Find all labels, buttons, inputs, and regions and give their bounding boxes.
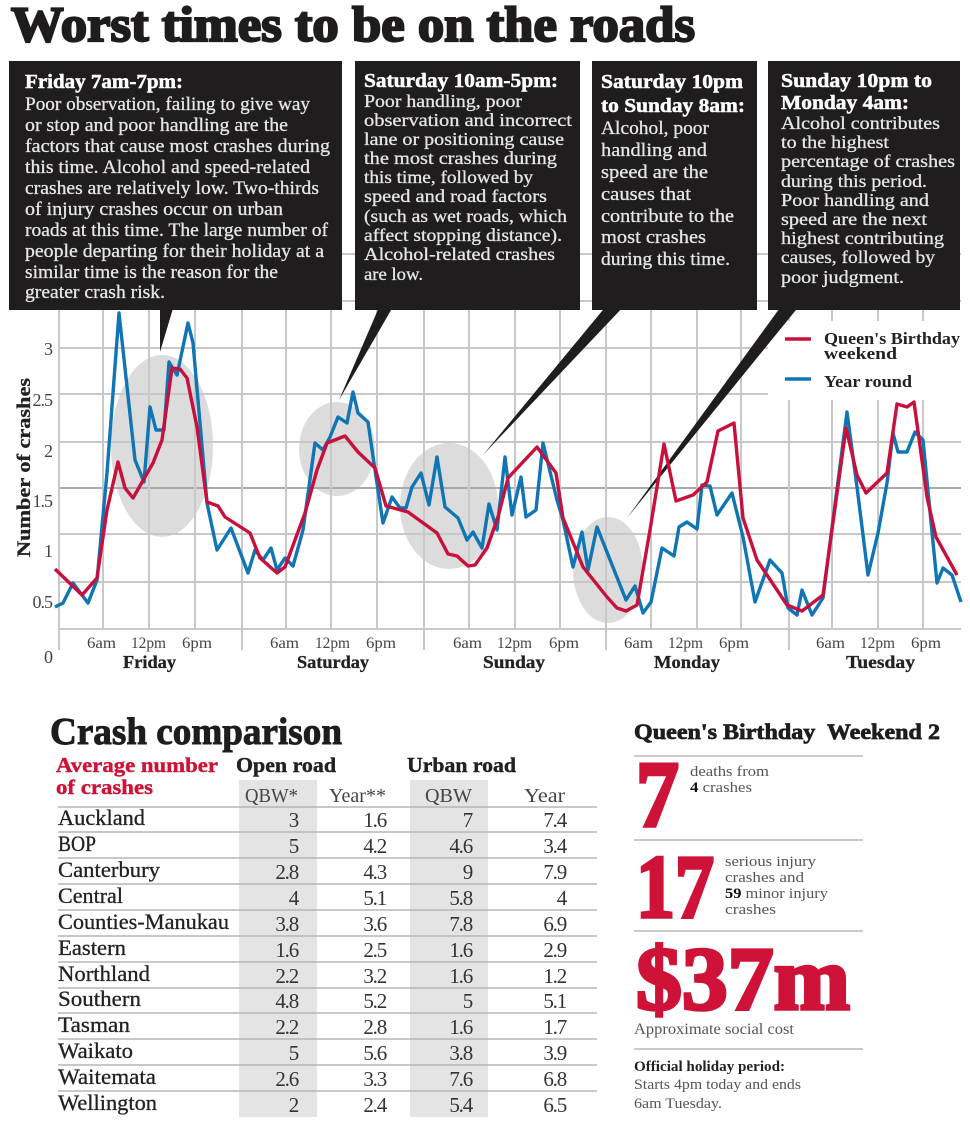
callout: Saturday 10pm to Sunday 8am: speed are the [601, 162, 708, 183]
pointer: Saturday night [483, 305, 625, 455]
column headings: QBW* [245, 785, 298, 807]
callout: Saturday 10am-5pm: are low. [364, 264, 423, 284]
column: open road Year: 4.2 [363, 834, 387, 858]
callout: Saturday 10pm to Sunday 8am [592, 61, 757, 310]
column: urban road Year: 4 [557, 886, 568, 910]
column: open road Year: 3.6 [363, 912, 387, 936]
x-axis time labels: 12pm [131, 635, 167, 652]
x-axis time labels: 6pm [719, 635, 750, 652]
column: urban road Year: 5.1 [543, 989, 567, 1013]
callout: Sunday 10pm to Monday 4am [768, 61, 960, 310]
x-axis time labels: 6am [624, 635, 654, 652]
column: urban road Year: 7.9 [543, 860, 567, 884]
callout: Saturday 10am-5pm: observation and incorrect [364, 110, 572, 130]
x-axis time labels: 12pm [497, 635, 533, 652]
column: urban road QBW: 7.6 [449, 1067, 473, 1091]
region names [58, 805, 229, 1115]
note: official holiday period: Starts 4pm today and ends [634, 1077, 801, 1093]
legend: weekend [824, 344, 898, 363]
note: official holiday period [634, 1059, 801, 1112]
callout: Sunday 10pm to Monday 4am: percentage of crashes [781, 151, 955, 171]
column: urban road Year: 7.4 [543, 808, 568, 832]
column: open road Year: 5.2 [363, 989, 387, 1013]
callout: Friday 7am-7pm: factors that cause most crashes during [25, 136, 331, 157]
region names: BOP [58, 831, 96, 856]
stat: injury crashes: crashes and [725, 870, 805, 886]
x-axis day labels: Monday [654, 652, 720, 672]
callout: Saturday 10am-5pm: Alcohol-related crashes [364, 244, 555, 264]
callout: Friday 7am-7pm: people departing for their holiday at a [25, 241, 325, 262]
legend: Queen's Birthday [824, 329, 961, 348]
line chart: crashes by time of day [14, 254, 968, 672]
legend background [768, 321, 968, 400]
y-axis labels: 2 [44, 441, 52, 461]
column: open road Year: 2.5 [363, 938, 387, 962]
table subtitle [56, 753, 218, 799]
column: open road Year [363, 808, 388, 1117]
callout: Saturday 10pm to Sunday 8am: contribute to the [601, 206, 734, 227]
legend: Year round [824, 372, 913, 391]
pointer: Sunday night [627, 305, 800, 518]
callout: Friday 7am-7pm: greater crash risk. [25, 282, 165, 303]
highlight ellipse: Saturday night [400, 443, 498, 569]
callout: Sunday 10pm to Monday 4am: Sunday 10pm to [781, 70, 932, 92]
x-axis time labels: 6am [816, 635, 846, 652]
column: urban road Year: 6.5 [543, 1093, 567, 1117]
callout: Sunday 10pm to Monday 4am: Monday 4am: [781, 92, 909, 114]
x-axis day labels: Sunday [483, 652, 545, 672]
callout: Saturday 10am-5pm: lane or positioning cause [364, 129, 564, 149]
column: urban road QBW: 7 [463, 808, 473, 832]
column: open road QBW: 2.2 [275, 964, 299, 988]
column headings [245, 785, 565, 807]
callout: Saturday 10pm to Sunday 8am: Saturday 10pm [601, 71, 743, 93]
region names: Central [58, 883, 123, 908]
highlight ellipse: Sunday night [573, 517, 643, 623]
panel: Queen's Birthday Weekend 2 [634, 719, 940, 1112]
y-axis labels: 1 [44, 541, 52, 561]
column: urban road QBW: 5.8 [449, 886, 473, 910]
y-axis labels: 2.5 [32, 390, 53, 410]
stat: injury crashes: 59 minor injury [725, 886, 829, 902]
callout: Sunday 10pm to Monday 4am: Poor handling and [781, 190, 929, 210]
column: open road Year: 2.8 [363, 1015, 387, 1039]
callout: Saturday 10am-5pm: the most crashes during [364, 148, 557, 168]
x-axis day labels [123, 652, 915, 672]
stat: deaths: deaths from [690, 764, 769, 780]
x-axis time labels: 6pm [911, 635, 942, 652]
y-axis labels: 1.5 [32, 491, 53, 511]
callout: Saturday 10pm to Sunday 8am: causes that [601, 184, 692, 205]
x-axis time labels: 6am [270, 635, 300, 652]
region names: Canterbury [58, 857, 160, 882]
x-axis time labels: 6pm [366, 635, 397, 652]
x-axis time labels: 6am [453, 635, 483, 652]
column: urban road QBW: 4.6 [449, 834, 473, 858]
column: open road Year: 3.3 [363, 1067, 387, 1091]
column: urban road QBW: 7.8 [449, 912, 473, 936]
column: urban road QBW [449, 808, 474, 1117]
x-axis time labels: 12pm [315, 635, 351, 652]
column: open road Year: 1.6 [363, 808, 387, 832]
callout: Sunday 10pm to Monday 4am: speed are the next [781, 209, 927, 229]
column: urban road QBW: 5.4 [449, 1093, 474, 1117]
stat: injury crashes: crashes [725, 902, 776, 918]
column: urban road QBW: 3.8 [449, 1041, 473, 1065]
x-axis time labels [87, 635, 942, 652]
column: urban road Year: 6.9 [543, 912, 567, 936]
stat: injury crashes [636, 838, 829, 937]
y-axis labels [32, 339, 53, 667]
column: open road QBW: 1.6 [275, 938, 299, 962]
column: open road Year: 5.1 [363, 886, 387, 910]
column: open road QBW: 5 [289, 1041, 299, 1065]
y-axis labels: 0 [44, 647, 53, 667]
panel heading: Queen's Birthday Weekend 2 [634, 719, 940, 744]
column: open road QBW: 4.8 [275, 989, 299, 1013]
callout: Sunday 10pm to Monday 4am: to the highest [781, 132, 889, 152]
column: urban road Year: 6.8 [543, 1067, 567, 1091]
x-axis time labels: 6pm [549, 635, 580, 652]
note: official holiday period: Official holiday period: [634, 1059, 785, 1075]
table: crash comparison [56, 753, 597, 1117]
column group headings [236, 753, 516, 777]
column: open road QBW: 3.8 [275, 912, 299, 936]
column: urban road Year: 1.2 [543, 964, 567, 988]
callout: Saturday 10am-5pm: this time, followed by [364, 167, 533, 187]
callout: Friday 7am-7pm: this time. Alcohol and speed-related [25, 157, 311, 178]
callout: Sunday 10pm to Monday 4am: highest contributing [781, 228, 944, 248]
y-axis labels: 0.5 [32, 592, 53, 612]
callout: Saturday 10am-5pm: Saturday 10am-5pm: [364, 70, 558, 92]
callout: Saturday 10am-5pm [355, 61, 580, 310]
region names: Southern [58, 986, 141, 1011]
column: open road QBW: 3 [289, 808, 299, 832]
stat: deaths: 4 crashes [690, 780, 752, 796]
callout: Saturday 10am-5pm: affect stopping distance). [364, 225, 562, 246]
column: urban road QBW: 5 [463, 989, 473, 1013]
callout: Saturday 10pm to Sunday 8am: Alcohol, poor [601, 118, 710, 139]
callout: Saturday 10am-5pm: Poor handling, poor [364, 91, 522, 111]
region names: Counties-Manukau [58, 909, 229, 934]
column headings: Year** [329, 785, 386, 807]
note: official holiday period: 6am Tuesday. [634, 1096, 722, 1112]
callout: Friday 7am-7pm: crashes are relatively low. Two-thirds [25, 178, 319, 199]
column group headings: Urban road [407, 753, 516, 777]
column: open road QBW [275, 808, 300, 1117]
x-axis time labels: 6am [87, 635, 117, 652]
series: Queen's Birthday weekend [55, 368, 957, 611]
series: Year round [55, 313, 961, 615]
pointer: Saturday [339, 305, 394, 400]
callout: Sunday 10pm to Monday 4am: Alcohol contributes [781, 113, 940, 133]
column: urban road QBW: 1.6 [449, 964, 473, 988]
column: open road QBW: 4 [289, 886, 300, 910]
highlight ellipse: Saturday [299, 402, 375, 496]
legend [785, 329, 961, 391]
callout: Friday 7am-7pm: Poor observation, failing to give way [25, 94, 311, 115]
column: open road Year: 4.3 [363, 860, 387, 884]
region names: Waikato [58, 1038, 133, 1063]
callout: Sunday 10pm to Monday 4am: during this period. [781, 171, 927, 191]
callout: Saturday 10pm to Sunday 8am: most crashes [601, 227, 706, 248]
column: open road Year: 5.6 [363, 1041, 387, 1065]
heading: Crash comparison: Crash comparison [50, 711, 342, 753]
column group headings: Open road [236, 753, 336, 777]
column: urban road Year: 3.4 [543, 834, 568, 858]
stat: injury crashes: 17 [636, 838, 714, 937]
column: urban road Year: 3.9 [543, 1041, 567, 1065]
callout: Saturday 10pm to Sunday 8am: during this time. [601, 249, 730, 270]
column: urban road QBW: 9 [463, 860, 473, 884]
callout: Friday 7am-7pm: of injury crashes occur on urban [25, 199, 284, 220]
region names: Waitemata [58, 1064, 156, 1089]
callout: Sunday 10pm to Monday 4am: causes, followed by [781, 247, 935, 267]
pointer: Friday [160, 305, 174, 352]
callout: Sunday 10pm to Monday 4am: poor judgment. [781, 267, 904, 287]
x-axis time labels: 12pm [860, 635, 896, 652]
column: urban road QBW: 1.6 [449, 938, 473, 962]
column: open road QBW: 2.6 [275, 1067, 299, 1091]
region names: Auckland [58, 805, 145, 830]
x-axis time labels: 6pm [182, 635, 213, 652]
highlight ellipse: Friday [111, 355, 213, 537]
callout: Friday 7am-7pm [9, 61, 342, 310]
column: open road Year: 3.2 [363, 964, 387, 988]
callout: Saturday 10pm to Sunday 8am: to Sunday 8am: [601, 95, 745, 117]
callout: Saturday 10am-5pm: speed and road factors [364, 186, 547, 206]
stat: social cost: Approximate social cost [634, 1021, 795, 1038]
column: open road QBW: 5 [289, 834, 299, 858]
column: open road QBW: 2.2 [275, 1015, 299, 1039]
callout: Friday 7am-7pm: roads at this time. The large number of [25, 220, 329, 241]
column: open road QBW: 2 [289, 1093, 299, 1117]
stat: deaths: 7 [636, 743, 679, 847]
callout: Saturday 10am-5pm: (such as wet roads, which [364, 206, 567, 227]
x-axis time labels: 12pm [668, 635, 704, 652]
callout: Friday 7am-7pm: similar time is the reason for the [25, 262, 278, 283]
x-axis day labels: Friday [123, 652, 176, 672]
stat: deaths [636, 743, 769, 847]
column: open road Year: 2.4 [363, 1093, 388, 1117]
column: urban road Year [543, 808, 568, 1117]
column: urban road Year: 1.7 [543, 1015, 567, 1039]
table subtitle: of crashes [56, 775, 153, 799]
callout: Friday 7am-7pm: or stop and poor handling are the [25, 115, 288, 136]
stat: injury crashes: serious injury [725, 854, 817, 870]
y-axis title: Number of crashes [14, 378, 35, 557]
column: urban road Year: 2.9 [543, 938, 567, 962]
x-axis day labels: Saturday [297, 652, 369, 672]
region names: Tasman [58, 1012, 130, 1037]
callout: Saturday 10pm to Sunday 8am: handling and [601, 140, 708, 161]
region names: Wellington [58, 1090, 157, 1115]
x-axis day labels: Tuesday [846, 652, 915, 672]
region names: Eastern [58, 935, 126, 960]
column: open road QBW: 2.8 [275, 860, 299, 884]
callout: Friday 7am-7pm: Friday 7am-7pm: [25, 71, 183, 93]
column: urban road QBW: 1.6 [449, 1015, 473, 1039]
table subtitle: Average number [56, 753, 218, 777]
column headings: Year [524, 785, 565, 807]
column headings: QBW [425, 785, 472, 807]
y-axis labels: 3 [44, 339, 53, 359]
region names: Northland [58, 961, 150, 986]
stat: social cost: $37m [636, 930, 850, 1029]
